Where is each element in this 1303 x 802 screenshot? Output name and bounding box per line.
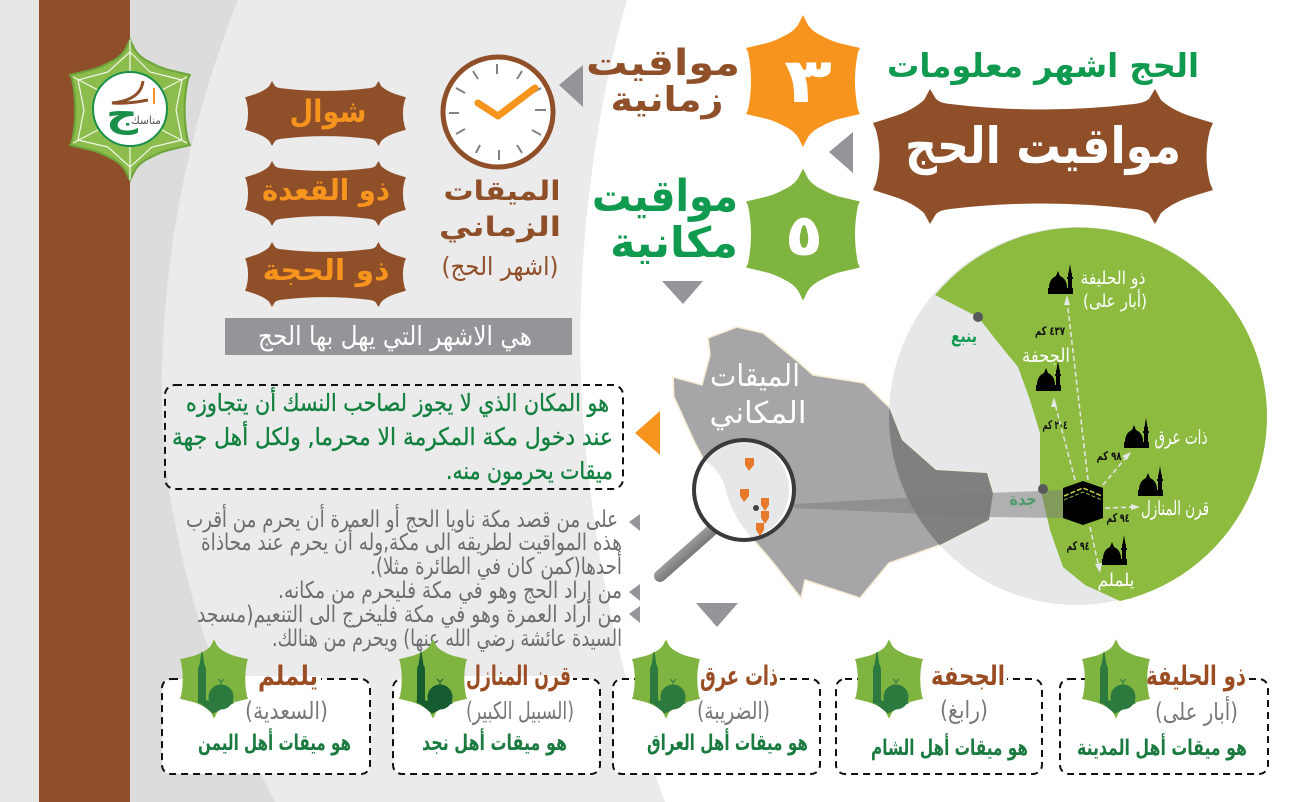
- badge: 3: [746, 15, 860, 147]
- distances: ٩٤ كم: [1106, 511, 1130, 525]
- badge: 3: ٣: [784, 44, 832, 117]
- distances: ٢٠٤ كم: [1042, 418, 1068, 432]
- logo: [70, 40, 190, 180]
- main title banner: [873, 89, 1213, 224]
- notes paragraph: السيدة عائشة رضي الله عنها) ويحرم من هنالك.: [272, 626, 622, 652]
- card: dhat irq: [613, 639, 820, 774]
- month banner: shawwal: شوال: [290, 94, 366, 130]
- card: al-juhfah: هو ميقات أهل الشام: [871, 732, 1028, 761]
- magnifier: [660, 440, 794, 576]
- distances: ٩٨ كم: [1096, 449, 1122, 463]
- card: al-juhfah: [836, 639, 1042, 774]
- heading: spatial miqats: مكانية: [610, 218, 738, 267]
- map circle: [889, 227, 1267, 605]
- heading: spatial miqats: مواقيت: [592, 171, 738, 222]
- map heading: الميقات: [710, 359, 800, 394]
- map heading: [710, 359, 806, 431]
- card: dhat irq: ذات عرق: [700, 661, 778, 692]
- card: dhu al-hulayfah: [1060, 639, 1268, 774]
- map label: yalamlam: يلملم: [1098, 570, 1134, 591]
- notes paragraph: هذه المواقيت لطريقه الى مكة,وله أن يحرم عند محاذاة: [201, 527, 622, 556]
- card: dhat irq: هو ميقات أهل العراق: [647, 727, 808, 756]
- city: yanbu: ينبع: [951, 326, 977, 347]
- subtitle: الحج اشهر معلومات: [887, 46, 1199, 86]
- definition box: ميقات يحرمون منه.: [446, 457, 613, 485]
- map label: al-juhfah: [1022, 345, 1070, 391]
- notes paragraph: من أراد العمرة وهو في مكة فليخرج الى التنعيم(مسجد: [197, 599, 622, 628]
- map label: yalamlam: [1098, 535, 1134, 591]
- month banner: shawwal: [245, 81, 406, 146]
- city: jeddah: [1010, 484, 1048, 510]
- brown vertical band: [39, 0, 130, 802]
- card: yalamlam: يلملم: [258, 661, 318, 692]
- heading: temporal miqats: [586, 43, 740, 120]
- badge: 5: ٥: [785, 201, 823, 269]
- heading: temporal miqats: زمانية: [610, 80, 724, 120]
- map label: dhu al-hulayfah: (أبار على): [1083, 289, 1147, 312]
- map heading: المكاني: [710, 396, 806, 431]
- icon: kaaba: [1063, 481, 1103, 525]
- notes paragraph: من إراد الحج وهو في مكة فليحرم من مكانه.: [278, 578, 622, 604]
- arrow: to clock: [559, 65, 583, 107]
- logo: ج: [106, 94, 138, 135]
- card: qarn al-manazil: [393, 639, 600, 774]
- month banner: dhu al-hijjah: [245, 242, 406, 307]
- icon: clock: [443, 57, 553, 167]
- card: al-juhfah: (رابغ): [940, 696, 988, 724]
- card: qarn al-manazil: (السبيل الكبير): [466, 697, 574, 725]
- arrowheads: [1051, 295, 1140, 573]
- definition box: هو المكان الذي لا يجوز لصاحب النسك أن يتجاوزه: [186, 387, 609, 417]
- card: yalamlam: [162, 639, 370, 774]
- notes paragraph: أحدها(كمن كان في الطائرة مثلا).: [370, 551, 622, 580]
- month banner: dhu al-qadah: [245, 161, 406, 226]
- card: qarn al-manazil: هو ميقات أهل نجد: [422, 727, 567, 756]
- bullets: [629, 514, 640, 623]
- map label: qarn al-manazil: [1138, 466, 1209, 520]
- heading: temporal miqat: الميقات: [444, 176, 560, 207]
- distances: [1035, 324, 1130, 553]
- arrow: to definition: [635, 411, 660, 455]
- card: qarn al-manazil: قرن المنازل: [466, 661, 571, 692]
- map label: al-juhfah: الجحفة: [1022, 345, 1070, 367]
- route arrows: [1054, 300, 1136, 568]
- grey caption bar: هي الاشهر التي يهل بها الحج: [258, 322, 532, 352]
- card: dhu al-hulayfah: ذو الحليفة: [1146, 661, 1246, 692]
- card: al-juhfah: الجحفة: [931, 661, 1005, 692]
- definition box: عند دخول مكة المكرمة الا محرما, ولكل أهل جهة: [172, 421, 613, 451]
- month banner: dhu al-qadah: ذو القعدة: [262, 173, 390, 207]
- card: yalamlam: (السعدية): [245, 697, 328, 725]
- heading: temporal miqat: (اشهر الحج): [442, 252, 558, 282]
- main title banner: مواقيت الحج: [905, 117, 1181, 176]
- logo: مناسك: [131, 114, 161, 127]
- notes paragraph: على من قصد مكة ناويا الحج أو العمرة أن يحرم من أقرب: [186, 504, 618, 533]
- heading: temporal miqat: الزماني: [439, 212, 561, 243]
- map label: dhat irq: ذات عرق: [1154, 425, 1208, 449]
- map label: dhat irq: [1124, 418, 1208, 449]
- map label: dhu al-hulayfah: ذو الحليفة: [1080, 268, 1146, 289]
- card: dhat irq: (الضريبة): [697, 697, 770, 725]
- notes paragraph: [186, 504, 622, 652]
- badge: 5: [746, 168, 860, 300]
- city: yanbu: [951, 312, 983, 347]
- arrow: down to cards: [696, 603, 738, 627]
- saudi map: [673, 327, 993, 598]
- heading: temporal miqats: مواقيت: [586, 43, 740, 84]
- card: dhu al-hulayfah: (أبار على): [1155, 696, 1238, 726]
- distances: ٤٣٧ كم: [1035, 324, 1065, 338]
- map label: dhu al-hulayfah: [1048, 264, 1147, 312]
- heading: temporal miqat: [439, 176, 561, 282]
- zoom beam: [794, 490, 1063, 518]
- arrow: down to map: [662, 281, 703, 304]
- distances: ٩٤ كم: [1066, 539, 1090, 553]
- card: yalamlam: هو ميقات أهل اليمن: [198, 727, 351, 756]
- month banner: dhu al-hijjah: ذو الحجة: [262, 253, 390, 287]
- arrow: from title: [829, 132, 853, 173]
- heading: spatial miqats: [592, 171, 738, 267]
- city: jeddah: جدة: [1010, 490, 1036, 510]
- map label: qarn al-manazil: قرن المنازل: [1141, 496, 1209, 520]
- definition box: [165, 385, 623, 489]
